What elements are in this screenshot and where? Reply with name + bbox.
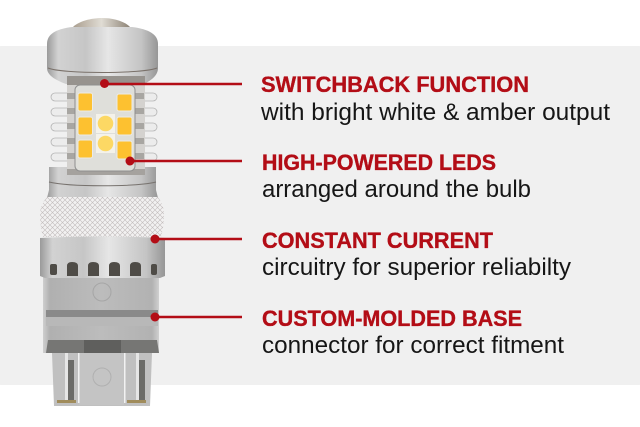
callout: custom-molded base: connector for correct fitment — [262, 332, 564, 359]
callout: constant current — [150, 228, 571, 281]
callout: constant current: circuitry for superior reliabilty — [262, 254, 571, 281]
callout: switchback function — [100, 72, 610, 126]
amber LEDs — [78, 93, 132, 159]
top cap — [47, 27, 158, 84]
lower collar — [47, 167, 158, 198]
callout: custom-molded base — [150, 306, 564, 359]
callout: switchback function: with bright white & amber output — [260, 99, 610, 126]
background panel — [0, 46, 640, 385]
lens — [72, 18, 131, 28]
LED board — [75, 85, 135, 171]
callout: custom-molded base: CUSTOM-MOLDED BASE — [262, 306, 522, 331]
metal collar with notches — [40, 236, 165, 278]
callout: constant current: CONSTANT CURRENT — [262, 228, 494, 253]
knurled ring — [40, 197, 164, 237]
callout: high-powered LEDs: HIGH-POWERED LEDS — [262, 150, 496, 175]
heatsink block — [67, 76, 145, 176]
LED bulb — [40, 18, 165, 406]
cooling fins — [51, 93, 157, 161]
plastic base — [43, 276, 159, 353]
callout: high-powered LEDs — [126, 150, 531, 203]
callout: high-powered LEDs: arranged around the bulb — [262, 176, 531, 203]
center LEDs — [96, 114, 115, 153]
connector — [52, 353, 152, 406]
callout: switchback function: SWITCHBACK FUNCTION — [261, 72, 529, 97]
